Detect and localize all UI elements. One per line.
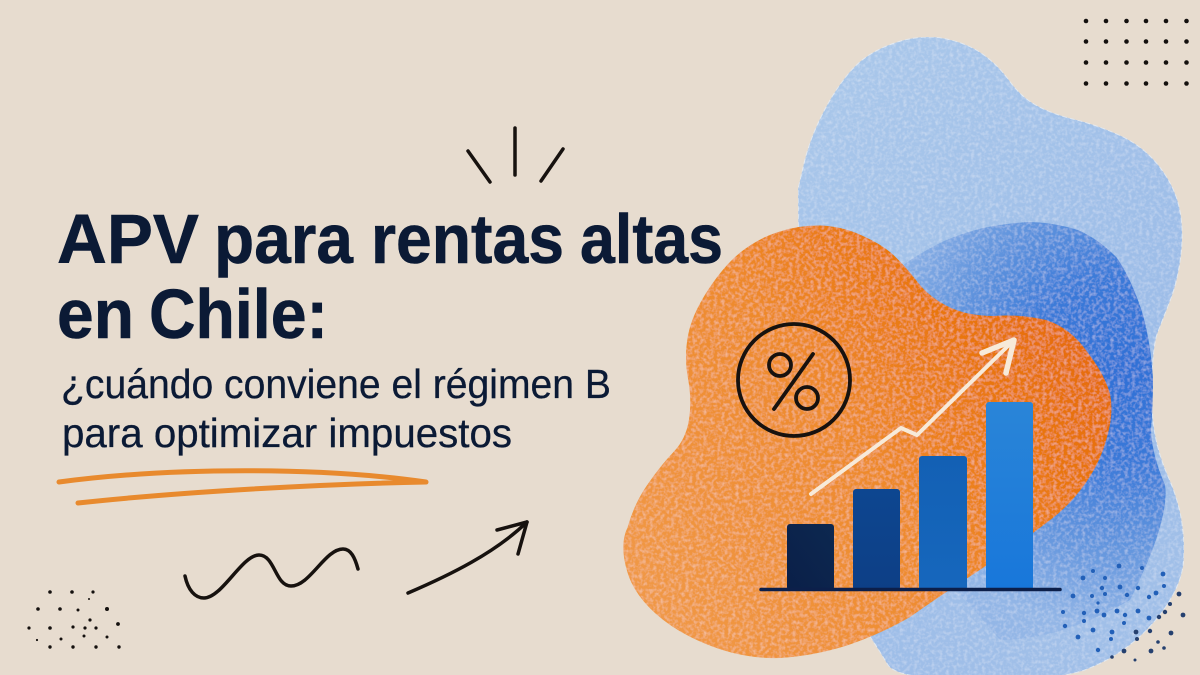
title: Chile: [149,275,328,353]
orange blob [623,225,1111,658]
subtitle: ¿cuándo conviene el régimen B [61,361,611,407]
title: rentas [371,200,564,278]
spark lines [468,128,563,182]
title: para [214,200,354,278]
growth arrow [811,340,1014,494]
bar chart [761,402,1060,590]
squiggle [185,549,358,598]
dot cluster bottom left [27,590,121,649]
hand-drawn arrow [408,522,527,593]
title: APV [57,200,199,278]
medium blue blob [880,222,1166,640]
title [57,200,723,353]
dot cluster bottom right [1061,564,1185,662]
dot grid top right [1084,19,1189,86]
subtitle: para optimizar impuestos [62,410,512,456]
title: en [57,275,134,353]
subtitle [61,361,611,456]
percent icon [738,324,850,436]
title: altas [580,200,723,278]
orange underline scribble [59,471,426,503]
light blue blob [798,37,1184,675]
